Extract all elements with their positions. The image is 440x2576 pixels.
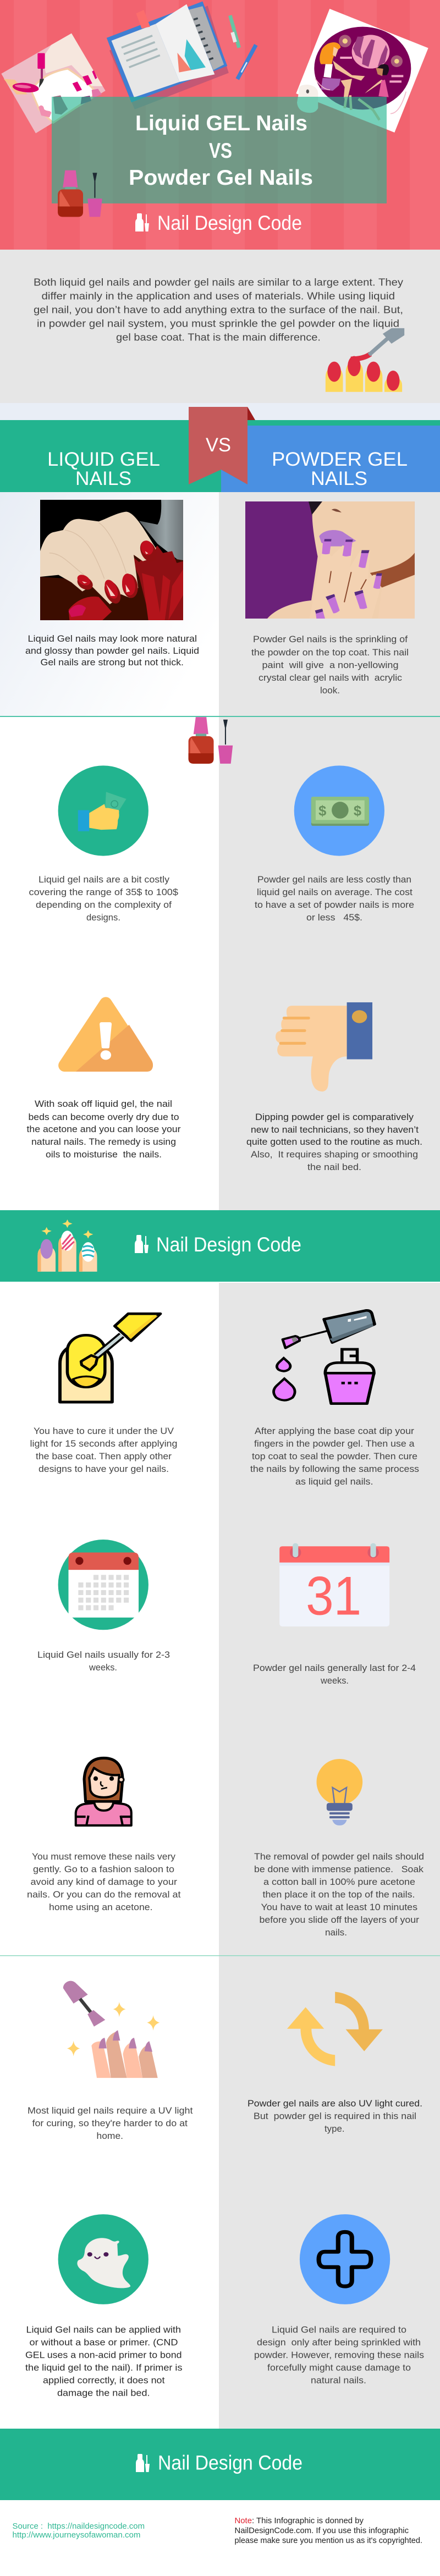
text: liquid gel drawback: natural nails. The remedy is using bbox=[31, 1137, 176, 1147]
icon: dollar bill circle: $ bbox=[354, 804, 361, 819]
text: powder gel curing: top coat to seal the powder. Then cure bbox=[252, 1451, 417, 1461]
text: powder gel home use: Powder gel nails are also UV light cured. bbox=[248, 2098, 422, 2109]
panel: intro: gel nail, you don’t have to add anything extra to the surface of the nail. But, bbox=[34, 305, 403, 316]
text: powder gel design bbox=[254, 2325, 424, 2385]
text: copyright note: please make sure you mention us as it's copyrighted. bbox=[234, 2536, 422, 2545]
text: powder gel duration: Powder gel nails generally last for 2-4 bbox=[253, 1663, 416, 1673]
photo: purple nails bbox=[245, 501, 415, 619]
text: powder gel drawback bbox=[246, 1112, 422, 1172]
heading: powder gel nails: POWDER GEL bbox=[272, 449, 408, 470]
text: liquid gel duration bbox=[37, 1650, 170, 1673]
text: powder gel removal: then place it on the top of the nails. bbox=[263, 1889, 415, 1900]
icon: dollar bill circle: $ bbox=[318, 804, 326, 819]
heading: powder gel nails bbox=[272, 449, 408, 489]
icon: calendar 31 bbox=[279, 1543, 389, 1627]
panel: right column cost and drawbacks bbox=[219, 716, 440, 1210]
text: powder gel design: design only after being sprinkled with bbox=[257, 2337, 421, 2348]
text: liquid gel removal: home using an acetone. bbox=[49, 1902, 153, 1912]
text: powder gel removal: You have to wait at least 10 minutes bbox=[261, 1902, 417, 1912]
text: liquid gel curing: light for 15 seconds after applying bbox=[30, 1438, 177, 1449]
text: liquid gel duration: Liquid Gel nails usually for 2-3 bbox=[37, 1650, 170, 1660]
logo: header: Nail Design Code bbox=[157, 212, 302, 234]
text: liquid gel curing: the base coat. Then apply other bbox=[36, 1451, 172, 1461]
text: powder gel curing: fingers in the powder gel. Then use a bbox=[254, 1438, 415, 1449]
text: powder gel duration: weeks. bbox=[320, 1675, 349, 1686]
illustration: open notebook bbox=[107, 2, 229, 109]
text: liquid gel home use bbox=[28, 2105, 193, 2141]
text: powder gel curing bbox=[250, 1426, 419, 1487]
text: liquid gel primer: Liquid Gel nails can be applied with bbox=[26, 2325, 181, 2335]
text: powder gel summary: the powder on the top coat. This nail bbox=[251, 647, 409, 658]
text: liquid gel primer: the liquid gel to the nail). If primer is bbox=[25, 2362, 183, 2373]
text: powder gel drawback: new to nail technicians, so they haven’t bbox=[251, 1124, 419, 1135]
panel: intro bbox=[0, 250, 440, 403]
text: liquid gel home use: for curing, so they're harder to do at bbox=[32, 2118, 188, 2128]
panel: intro: Both liquid gel nails and powder gel nails are similar to a large extent. They bbox=[34, 277, 403, 288]
text: liquid gel summary bbox=[25, 633, 199, 668]
text: powder gel cost bbox=[255, 874, 414, 923]
ribbon: VS bbox=[189, 407, 255, 484]
band: column headings background bbox=[0, 403, 440, 492]
icon: calendar 31: 31 bbox=[306, 1566, 361, 1627]
icon: warning triangle bbox=[64, 1003, 153, 1072]
text: liquid gel cost bbox=[29, 874, 179, 923]
text: powder gel design: powder. However, removing these nails bbox=[254, 2350, 424, 2360]
divider line bbox=[0, 716, 440, 717]
text: powder gel removal: The removal of powder gel nails should bbox=[254, 1851, 424, 1862]
text: powder gel design: forcefully might cause damage to bbox=[267, 2362, 411, 2373]
icon: UV brush on nail bbox=[60, 1314, 161, 1402]
illustration: nail card left bbox=[1, 34, 106, 133]
text: sources bbox=[12, 2522, 145, 2540]
band: footer logo: Nail Design Code bbox=[158, 2451, 302, 2474]
text: liquid gel drawback: With soak off liquid gel, the nail bbox=[35, 1099, 172, 1109]
text: powder gel drawback: quite gotten used to the routine as much. bbox=[246, 1137, 422, 1147]
text: powder gel drawback: the nail bed. bbox=[307, 1162, 361, 1172]
icon: dollar bill circle bbox=[294, 765, 384, 856]
panel: liquid gel summary background bbox=[0, 492, 219, 716]
text: liquid gel drawback: the acetone and you can loose your bbox=[26, 1124, 181, 1134]
text: copyright note: NailDesignCode.com. If you use this infographic bbox=[234, 2527, 409, 2535]
ribbon: VS: VS bbox=[206, 434, 231, 456]
text: liquid gel cost: designs. bbox=[86, 912, 120, 923]
text: liquid gel cost: covering the range of 35$ to 100$ bbox=[29, 887, 179, 897]
text: liquid gel primer: or without a base or primer. (CND bbox=[30, 2337, 178, 2348]
title box: Powder Gel Nails bbox=[129, 166, 313, 190]
icon: nail polish bottle divider bbox=[189, 717, 233, 764]
text: powder gel curing: as liquid gel nails. bbox=[295, 1476, 373, 1487]
panel: intro: in powder gel nail system, you must sprinkle the gel powder on the liquid bbox=[37, 318, 399, 329]
text: powder gel summary bbox=[251, 634, 409, 696]
text: copyright note: Note bbox=[234, 2517, 252, 2525]
text: liquid gel summary: Gel nails are strong but not thick. bbox=[41, 657, 184, 668]
icon: decorated nails bbox=[37, 1220, 97, 1272]
text: liquid gel removal: nails. Or you can do the removal at bbox=[27, 1889, 181, 1900]
text: powder gel cost: to have a set of powder nails is more bbox=[255, 900, 414, 910]
text: liquid gel cost: depending on the complexity of bbox=[36, 900, 172, 910]
text: liquid gel curing: You have to cure it under the UV bbox=[34, 1426, 174, 1436]
text: powder gel home use: But powder gel is required in this nail bbox=[254, 2111, 416, 2121]
text: liquid gel cost: Liquid gel nails are a bit costly bbox=[38, 874, 170, 885]
text: powder gel cost: or less 45$. bbox=[306, 912, 362, 923]
text: liquid gel primer: damage the nail bed. bbox=[57, 2387, 150, 2398]
icon: woman bbox=[76, 1758, 131, 1825]
text: powder gel home use: type. bbox=[324, 2123, 344, 2134]
text: copyright note: : This Infographic is donned by bbox=[252, 2517, 364, 2525]
icon: green pencil bbox=[230, 15, 239, 48]
heading: liquid gel nails: NAILS bbox=[75, 468, 131, 489]
icon: thumbs down bbox=[276, 1002, 372, 1091]
icon: painting nails bbox=[326, 328, 404, 392]
text: powder gel design: Liquid Gel nails are required to bbox=[272, 2325, 406, 2335]
text: liquid gel primer: applied correctly, it does not bbox=[43, 2375, 165, 2385]
text: powder gel removal: nails. bbox=[325, 1927, 347, 1938]
text: powder gel removal: a cotton ball in 100% pure acetone bbox=[263, 1877, 415, 1887]
text: powder gel curing: the nails by following the same process bbox=[250, 1464, 419, 1474]
text: sources: http://www.journeysofawoman.com bbox=[12, 2531, 141, 2540]
text: powder gel removal: be done with immense patience. Soak bbox=[254, 1864, 424, 1874]
icon: cycle arrows bbox=[287, 1992, 383, 2066]
icon: hand holding money bbox=[58, 765, 148, 856]
text: liquid gel duration: weeks. bbox=[89, 1662, 117, 1673]
panel: right column lower bbox=[219, 1283, 440, 2429]
title box bbox=[52, 97, 387, 203]
icon: light bulb bbox=[317, 1759, 362, 1825]
illustration: nail salon card right bbox=[296, 9, 428, 133]
text: powder gel design: natural nails. bbox=[311, 2375, 366, 2385]
photo: red nails bbox=[40, 500, 183, 620]
band: footer logo bbox=[0, 2429, 440, 2500]
text: liquid gel home use: home. bbox=[97, 2131, 123, 2141]
text: liquid gel summary: Liquid Gel nails may look more natural bbox=[28, 633, 197, 644]
heading: liquid gel nails bbox=[47, 449, 160, 489]
panel: powder gel summary background bbox=[219, 492, 440, 716]
icon: nail polish bottle header bbox=[58, 170, 102, 217]
icon: plus on circle bbox=[300, 2214, 390, 2304]
text: liquid gel drawback bbox=[26, 1099, 181, 1160]
text: powder gel summary: crystal clear gel nails with acrylic bbox=[258, 672, 403, 683]
title box: Liquid GEL Nails bbox=[135, 112, 307, 135]
text: powder gel summary: paint will give a non-yellowing bbox=[262, 660, 398, 670]
text: powder gel home use bbox=[248, 2098, 422, 2134]
panel: intro: differ mainly in the application and uses of materials. While using liquid bbox=[42, 290, 395, 301]
text: powder gel summary: look. bbox=[320, 685, 340, 696]
text: liquid gel primer: GEL uses a non-acid primer to bond bbox=[25, 2350, 182, 2360]
text: liquid gel drawback: oils to moisturise the nails. bbox=[46, 1149, 162, 1160]
text: powder gel drawback: Also, It requires shaping or smoothing bbox=[251, 1149, 418, 1160]
text: powder gel removal: before you slide off the layers of your bbox=[260, 1915, 419, 1925]
panel: header banner bbox=[0, 0, 440, 250]
band: mid logo: Nail Design Code bbox=[156, 1233, 301, 1256]
text: liquid gel drawback: beds can become overly dry due to bbox=[29, 1112, 179, 1122]
icon: calendar on circle bbox=[58, 1540, 148, 1630]
text: powder gel drawback: Dipping powder gel is comparatively bbox=[255, 1112, 414, 1122]
text: powder gel removal bbox=[254, 1851, 424, 1938]
text: liquid gel home use: Most liquid gel nails require a UV light bbox=[28, 2105, 193, 2116]
text: liquid gel curing bbox=[30, 1426, 177, 1474]
heading: powder gel nails: NAILS bbox=[311, 468, 367, 489]
divider line lower bbox=[0, 1955, 440, 1956]
text: liquid gel summary: and glossy than powder gel nails. Liquid bbox=[25, 646, 199, 656]
text: powder gel cost: liquid gel nails on average. The cost bbox=[257, 887, 413, 897]
icon: powder dip bottle bbox=[274, 1310, 375, 1404]
text: liquid gel removal bbox=[27, 1851, 181, 1912]
text: liquid gel primer bbox=[25, 2325, 183, 2398]
text: powder gel cost: Powder gel nails are less costly than bbox=[257, 874, 411, 885]
panel: intro: gel base coat. That is the main difference. bbox=[116, 332, 321, 343]
text: powder gel curing: After applying the base coat dip your bbox=[255, 1426, 414, 1436]
text: powder gel summary: Powder Gel nails is the sprinkling of bbox=[253, 634, 408, 644]
text: liquid gel removal: gently. Go to a fashion saloon to bbox=[33, 1864, 174, 1874]
icon: blue pencil bbox=[238, 45, 256, 79]
text: liquid gel removal: avoid any kind of damage to your bbox=[31, 1877, 177, 1887]
text: sources: Source : https://naildesigncode.com bbox=[12, 2522, 145, 2531]
band: mid logo bbox=[0, 1210, 440, 1282]
title box: VS bbox=[209, 139, 232, 163]
text: liquid gel curing: designs to have your gel nails. bbox=[38, 1464, 169, 1474]
text: liquid gel removal: You must remove these nails very bbox=[32, 1851, 176, 1862]
icon: ghost on circle bbox=[58, 2214, 148, 2304]
heading: liquid gel nails: LIQUID GEL bbox=[47, 449, 160, 470]
text: copyright note bbox=[234, 2517, 422, 2545]
icon: polish and fingers bbox=[63, 1981, 160, 2078]
text: powder gel duration bbox=[253, 1663, 416, 1686]
